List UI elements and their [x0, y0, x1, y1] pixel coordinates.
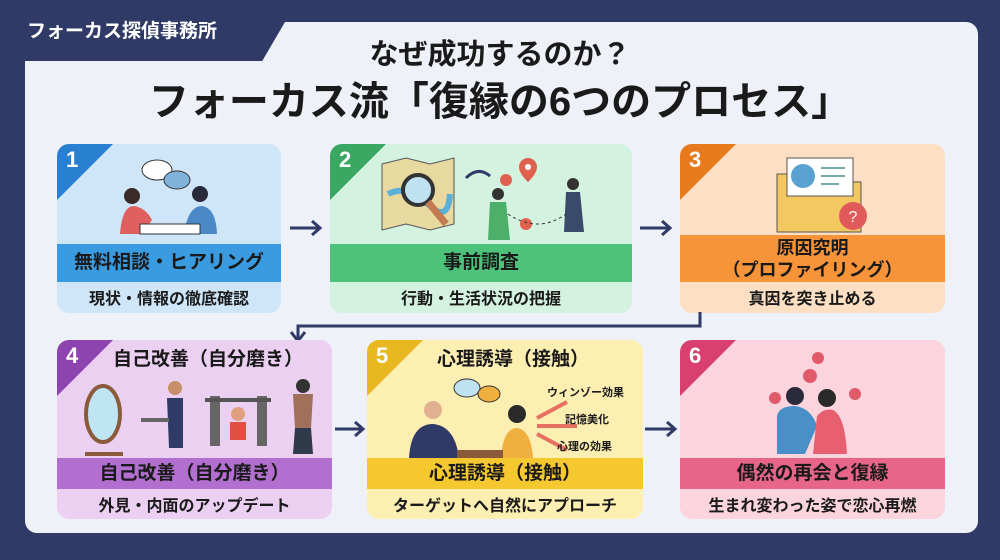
band: step 3	[680, 235, 945, 282]
card 3: 3	[689, 147, 701, 172]
card 6	[680, 340, 945, 519]
card 2	[330, 144, 632, 313]
effect labels: 記憶美化	[565, 414, 609, 426]
band: step 6	[680, 458, 945, 489]
band: step 1	[57, 244, 281, 282]
card 6: 6	[689, 343, 701, 368]
connector arrow 3-4	[290, 312, 702, 340]
arrow 4-5	[335, 421, 366, 437]
card 4: 4	[66, 343, 78, 368]
brand tag: フォーカス探偵事務所	[27, 21, 217, 42]
icon: couple with hearts	[769, 352, 861, 454]
band: step 6: 偶然の再会と復縁	[736, 463, 888, 484]
heading 4: 自己改善（自分磨き）	[113, 349, 303, 370]
icon: conversation with arrows	[409, 378, 577, 458]
icon: folder profile: ?	[849, 209, 858, 226]
band: step 3: （プロファイリング）	[722, 260, 902, 280]
card 1	[57, 144, 281, 313]
card 1: 1	[66, 147, 78, 172]
band: step 5	[367, 458, 643, 489]
icon: consultation	[120, 160, 217, 234]
arrow 2-3	[640, 220, 672, 236]
effect labels: ウィンゾー効果	[547, 387, 624, 399]
subtitle 2: 行動・生活状況の把握	[401, 291, 561, 308]
card 3	[680, 144, 945, 313]
card 2: 2	[339, 147, 351, 172]
band: step 5: 心理誘導（接触）	[429, 463, 581, 484]
card 5	[367, 340, 643, 519]
subtitle 6: 生まれ変わった姿で恋心再燃	[708, 498, 916, 515]
subtitle 3: 真因を突き止める	[748, 291, 876, 308]
effect labels	[547, 386, 624, 453]
card 4	[57, 340, 332, 519]
band: step 3: 原因究明	[776, 238, 848, 258]
arrow 5-6	[645, 421, 678, 437]
subtitle 4: 外見・内面のアップデート	[98, 498, 290, 515]
title: なぜ成功するのか？	[369, 39, 630, 71]
card 5: 5	[376, 343, 388, 368]
title: フォーカス流「復縁の6つのプロセス」	[149, 80, 851, 124]
title	[149, 38, 851, 124]
subtitle 1: 現状・情報の徹底確認	[89, 291, 249, 308]
arrow 1-2	[290, 220, 322, 236]
heading 5: 心理誘導（接触）	[437, 349, 589, 370]
band: step 2	[330, 244, 632, 282]
effect labels: 心理の効果	[557, 441, 612, 453]
band: step 4: 自己改善（自分磨き）	[99, 463, 290, 484]
icon: map and walkers	[382, 157, 584, 240]
band: step 1: 無料相談・ヒアリング	[74, 252, 264, 273]
band: step 4	[57, 458, 332, 489]
icon: self improvement	[84, 379, 313, 456]
icon: folder profile	[776, 158, 867, 232]
subtitle 5: ターゲットへ自然にアプローチ	[393, 498, 617, 515]
band: step 2: 事前調査	[443, 252, 519, 273]
brand tag	[25, 20, 285, 61]
